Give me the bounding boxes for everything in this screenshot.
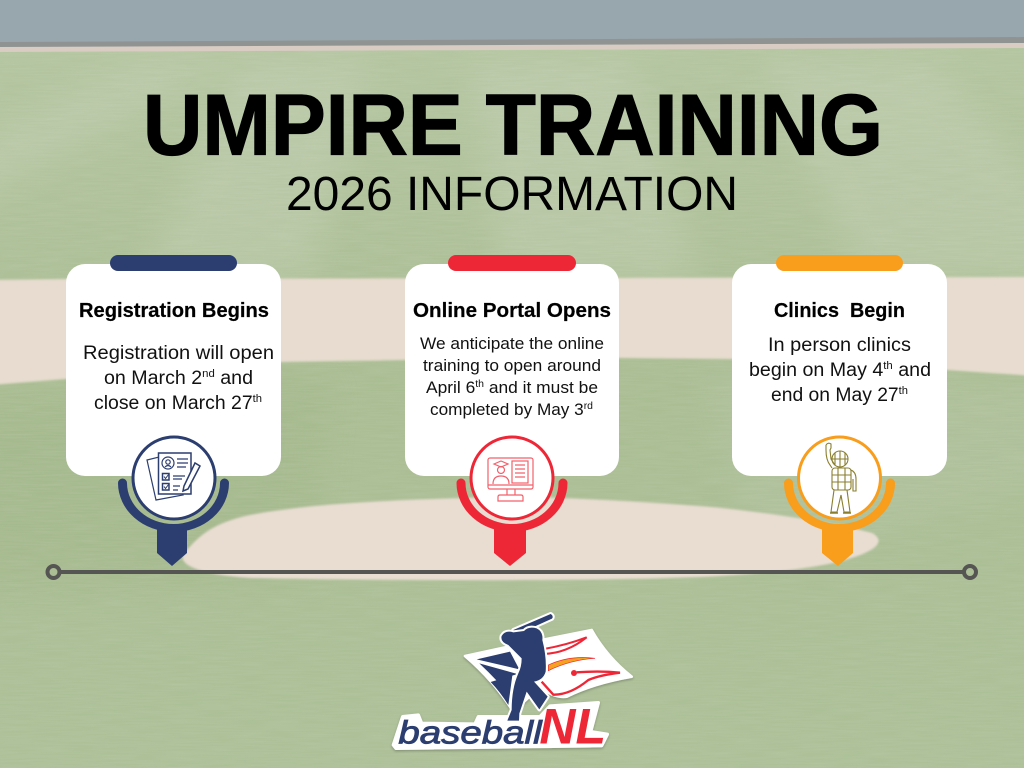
body text: clinic dates bbox=[749, 335, 931, 406]
flag bbox=[465, 630, 632, 712]
body text: clinic dates: th bbox=[899, 385, 908, 397]
heading: online portal opens: Online Portal Opens bbox=[413, 300, 611, 322]
body text: registration dates: close on March 27 bbox=[94, 393, 249, 414]
marker: clinics pin bbox=[784, 437, 895, 566]
body text: clinic dates: and bbox=[893, 360, 931, 381]
icon: registration forms bbox=[147, 453, 200, 500]
body text: online training dates: completed by May 3 bbox=[430, 401, 578, 419]
heading: registration begins: Registration Begins bbox=[79, 300, 269, 322]
marker: registration pin bbox=[118, 437, 229, 566]
logo white backing bbox=[393, 703, 607, 748]
body text: clinic dates: begin on May 4 bbox=[749, 360, 879, 381]
wordmark NL: NL bbox=[539, 698, 606, 754]
body text: registration dates: nd bbox=[202, 368, 215, 380]
panel: registration begins bbox=[66, 255, 281, 476]
logo: baseball NL bbox=[393, 614, 632, 754]
body text: clinic dates: th bbox=[883, 360, 893, 372]
accent bar: red bbox=[448, 255, 576, 271]
body text: online training dates: rd bbox=[584, 401, 593, 412]
body text: online training dates: We anticipate the online bbox=[420, 335, 604, 353]
body text: online training dates bbox=[420, 335, 604, 419]
body text: registration dates: on March 2 bbox=[104, 368, 199, 389]
body text: online training dates: training to open around bbox=[423, 357, 601, 375]
panel: online portal opens bbox=[405, 255, 619, 476]
subtitle: 2026 INFORMATION bbox=[286, 168, 738, 221]
title: UMPIRE TRAINING bbox=[143, 78, 883, 174]
icon: online training monitor bbox=[488, 458, 533, 501]
body text: clinic dates: end on May 27 bbox=[771, 385, 897, 406]
accent bar: navy bbox=[110, 255, 237, 271]
timeline bbox=[48, 566, 976, 578]
body text: clinic dates: In person clinics bbox=[768, 335, 911, 356]
heading: clinics begin: Clinics Begin bbox=[774, 300, 905, 322]
icon: umpire bbox=[826, 443, 856, 513]
panel: clinics begin bbox=[732, 255, 947, 476]
body text: online training dates: and it must be bbox=[484, 379, 598, 397]
body text: registration dates: and bbox=[215, 368, 253, 389]
body text: registration dates: th bbox=[253, 393, 262, 405]
body text: online training dates: April 6 bbox=[426, 379, 473, 397]
body text: online training dates: th bbox=[475, 379, 484, 390]
body text: registration dates bbox=[83, 343, 274, 414]
wordmark: baseball bbox=[398, 714, 543, 750]
batter silhouette bbox=[501, 614, 553, 721]
body text: registration dates: Registration will open bbox=[83, 343, 274, 364]
marker: online portal pin bbox=[456, 437, 568, 566]
accent bar: orange bbox=[776, 255, 903, 271]
